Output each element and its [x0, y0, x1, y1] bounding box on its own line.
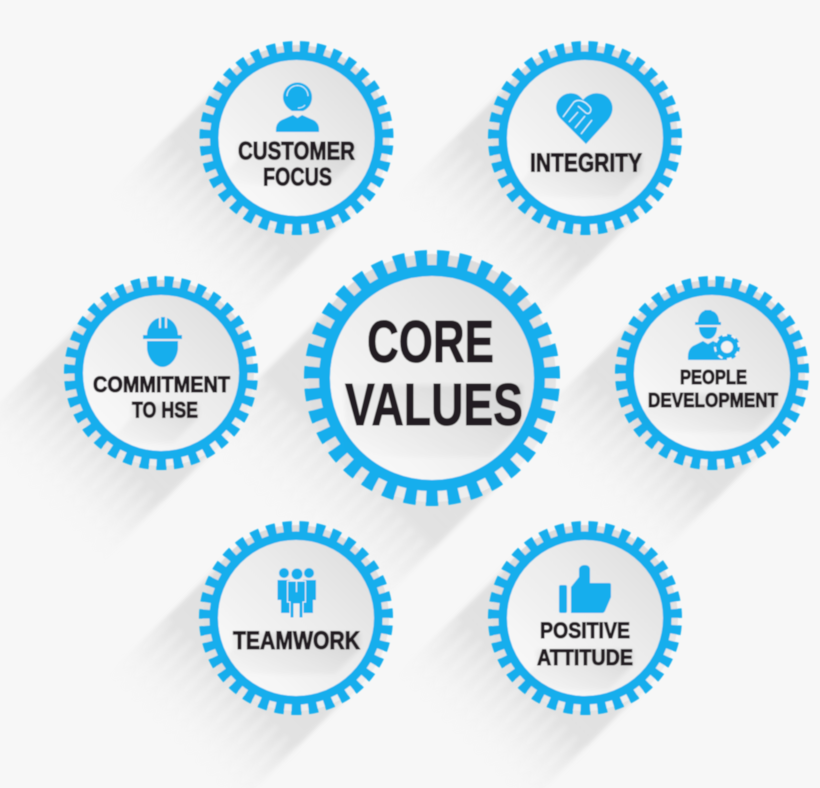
panel: teamwork gear: [203, 525, 389, 711]
label: customer focus: CUSTOMER: [238, 138, 355, 166]
title: core values: VALUES: [345, 372, 523, 438]
panel: customer focus gear: [204, 45, 390, 231]
label: customer focus: FOCUS: [263, 164, 332, 192]
label: people development: DEVELOPMENT: [648, 389, 778, 412]
panel: people development gear: [619, 280, 805, 466]
icon: headset agent: [276, 82, 319, 132]
panel: positive attitude gear: [492, 525, 678, 711]
label: commitment to HSE: [93, 372, 230, 422]
label: positive attitude: [537, 618, 633, 670]
title: core values: [345, 309, 523, 438]
label: customer focus: [238, 138, 355, 192]
icon: worker with gear: [688, 310, 740, 360]
label: commitment to HSE: TO HSE: [132, 398, 198, 422]
title: core values: CORE: [367, 309, 494, 375]
panel: integrity gear: [492, 45, 678, 231]
label: teamwork: TEAMWORK: [233, 627, 360, 655]
icon: team of three: [278, 568, 316, 618]
label: integrity: INTEGRITY: [530, 148, 642, 178]
label: positive attitude: POSITIVE: [540, 618, 630, 643]
label: people development: PEOPLE: [680, 366, 747, 389]
label: positive attitude: ATTITUDE: [537, 645, 633, 670]
label: commitment to HSE: COMMITMENT: [93, 372, 230, 397]
icon: handshake heart: [556, 93, 613, 144]
icon: safety helmet: [143, 317, 182, 367]
icon: thumbs up: [559, 565, 611, 613]
panel: core values central gear: [308, 254, 556, 502]
panel: commitment to HSE gear: [68, 280, 254, 466]
label: people development: [648, 366, 778, 412]
